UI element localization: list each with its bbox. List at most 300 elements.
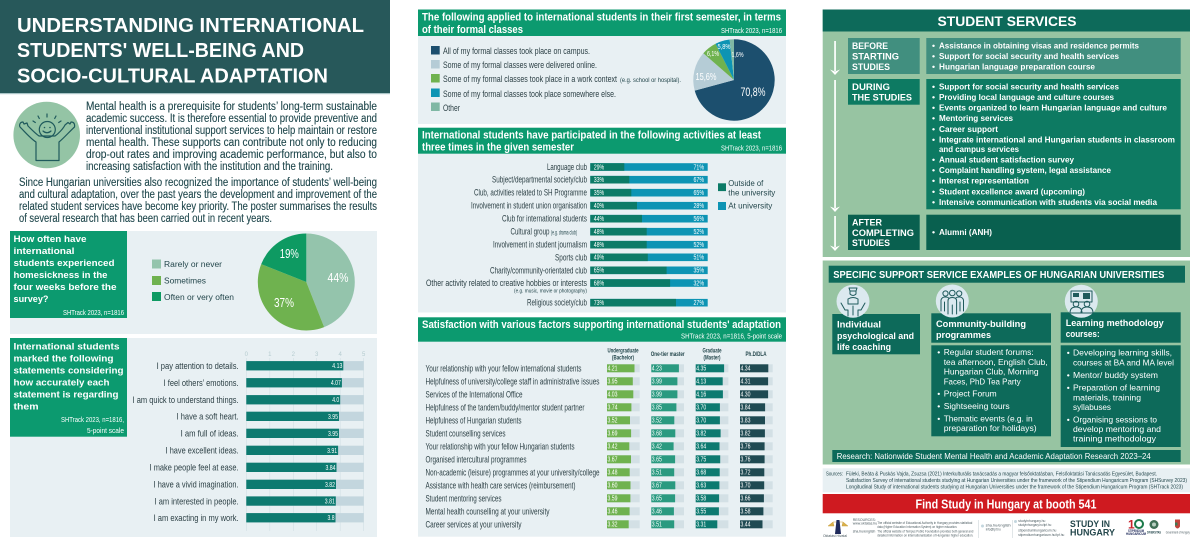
after completing studies label: STUDIES (852, 237, 890, 248)
contact links: stipendiumhungaricum.hu (1018, 529, 1056, 533)
logo: stipendium hungaricum 10: STIPENDIUM (1128, 529, 1144, 533)
logo: diversitas emblem (1147, 520, 1161, 534)
before starting studies list: Hungarian language preparation course (939, 61, 1095, 71)
satisfaction bar table: 3.82 (740, 431, 751, 438)
activities stacked bar chart: 52% (694, 242, 704, 249)
during the studies list: Providing local language and culture courses (939, 92, 1114, 102)
formal classes legend: Some of my formal classes were delivered online. (443, 60, 597, 71)
activities stacked bar chart: Religious society/club (527, 298, 587, 309)
during the studies label: DURING (852, 81, 890, 92)
satisfaction bar table: 3.76 (740, 444, 751, 451)
statements question box (10, 338, 127, 437)
title banner (0, 0, 390, 94)
satisfaction bar table: 4.13 (696, 379, 706, 386)
homesickness pie chart: 44% (328, 270, 349, 285)
activities stacked bar chart: 35% (594, 190, 604, 197)
satisfaction bar table: 3.42 (652, 444, 662, 451)
satisfaction bar table: 3.69 (608, 431, 618, 438)
title banner: STUDENTS' WELL-BEING AND (17, 40, 304, 62)
satisfaction bar table: Assistance with health care services (reimbursement) (426, 480, 576, 491)
during the studies list: Integrate international and Hungarian students in classroom (939, 134, 1175, 144)
satisfaction bar table: 3.70 (740, 483, 751, 490)
community-building list: Project Forum (944, 389, 997, 399)
activities stacked bar chart: 68% (594, 280, 604, 287)
satisfaction bar table: Services of the International Office (426, 389, 522, 400)
learning methodology list (1061, 345, 1181, 447)
satisfaction bar table: 3.32 (608, 522, 618, 529)
satisfaction bar table (426, 363, 773, 530)
satisfaction bar table: 4.21 (608, 366, 618, 373)
statements bar chart: 3.95 (328, 431, 338, 438)
student services heading: STUDENT SERVICES (938, 13, 1076, 29)
community-building list: preparation for holidays) (944, 423, 1037, 433)
intro paragraph 2: Since Hungarian universities also recognized the importance of students’ well-being (19, 177, 377, 189)
homesickness legend: Often or very often (164, 293, 234, 302)
satisfaction bar table: Helpfulness of the tandem/buddy/mentor student partner (426, 402, 585, 413)
satisfaction bar table: 3.42 (608, 444, 618, 451)
logo: educational authority scales: Oktatási Hivatal (823, 534, 847, 538)
activities stacked bar chart: Club, activities related to SH Programme (474, 188, 587, 199)
resource descriptions: data (Higher Education Information System) on higher education. (877, 525, 957, 529)
activities stacked bar chart: 65% (594, 268, 604, 275)
satisfaction bar table: 3.51 (652, 470, 662, 477)
after completing studies list: Alumni (ANH) (939, 227, 992, 237)
statements question box: how accurately each (14, 378, 110, 388)
homesickness question box: How often have (14, 234, 86, 244)
statements question box: marked the following (14, 354, 114, 364)
statements bar chart: 5 (362, 352, 366, 358)
intro paragraph 2: of several research that has been carried out in recent years. (19, 213, 272, 225)
statements question box: International students (14, 342, 120, 352)
individual coaching box (832, 314, 920, 354)
satisfaction bar table: 3.65 (652, 496, 662, 503)
intro paragraph 1: Mental health is a prerequisite for students’ long-term sustainable (86, 101, 377, 113)
logo: educational authority scales (823, 520, 848, 538)
homesickness question box: survey? (14, 294, 49, 304)
formal classes heading: of their formal classes (422, 24, 523, 36)
intro paragraph 1: interventional institutional support services to help maintain or restore (86, 125, 377, 137)
statements bar chart: I make people feel at ease. (150, 463, 239, 474)
formal classes legend: Some of my formal classes took place in a work context (443, 74, 617, 85)
contact links: info@tpf.hu (986, 528, 1001, 532)
activities legend: Outside of (728, 179, 764, 188)
satisfaction column headers: One-tier master (651, 352, 685, 358)
during the studies list: • (932, 113, 935, 123)
before starting studies label: STUDIES (852, 61, 890, 72)
satisfaction heading: Satisfaction with various factors supporting international students' adaptation (422, 319, 781, 331)
examples heading (829, 266, 1185, 283)
during the studies list: Career support (939, 124, 998, 134)
individual coaching box: psychological and (837, 330, 914, 341)
statements bar chart: 3.8 (328, 515, 335, 522)
homesickness question box: students experienced (14, 258, 115, 268)
contact links: sha.hu/english (986, 524, 1011, 528)
activities heading: International students have participated in the following activities at least (422, 130, 761, 142)
community-building list: • (937, 413, 940, 423)
intro paragraph 2: related student services have become key priority. The poster summarises the results (19, 201, 377, 213)
panel: student services (823, 10, 1190, 257)
satisfaction column headers: (Bachelor) (612, 355, 634, 361)
satisfaction column headers: Ph.D/DLA (746, 352, 767, 358)
arrow: during studies (830, 80, 840, 212)
during the studies list: • (932, 186, 935, 196)
before starting studies label: BEFORE (852, 40, 888, 51)
community-building heading box (931, 313, 1051, 343)
sources box: Füleki, Beáta & Puskás Vajda, Zsuzsa (2021) Interkulturális tanácsadás a magyar felsőoktatásban, Felsőoktatási Tanácsadás Egyesület, Budapest. (846, 471, 1157, 477)
satisfaction bar table: 4.31 (740, 379, 751, 386)
resource descriptions: detailed information on internationalisation of Hungarian higher education. (877, 533, 973, 537)
panel: satisfaction (418, 317, 786, 537)
statements bar chart: 3.84 (326, 465, 336, 472)
statements bar chart: 4.0 (332, 397, 339, 404)
activities stacked bar chart: Cultural group (510, 227, 550, 238)
title banner: UNDERSTANDING INTERNATIONAL (17, 15, 364, 37)
examples heading: SPECIFIC SUPPORT SERVICE EXAMPLES OF HUNGARIAN UNIVERSITIES (833, 270, 1165, 281)
satisfaction column headers: Graduate (702, 348, 722, 354)
community-building list: Sightseeing tours (944, 401, 1010, 411)
activities heading: three times in the given semester (422, 142, 575, 154)
during the studies list: • (932, 176, 935, 186)
resource descriptions: The official website of Tempus Public Foundation provides both general and (877, 529, 973, 533)
homesickness pie chart: 37% (274, 295, 294, 310)
activities stacked bar chart: 48% (594, 229, 604, 236)
homesickness legend (152, 260, 234, 302)
activities stacked bar chart: 56% (694, 216, 704, 223)
satisfaction bar table: 3.84 (740, 405, 751, 412)
activities stacked bar chart: 44% (594, 216, 604, 223)
learning methodology list: Organising sessions to (1073, 414, 1157, 424)
activities stacked bar chart: 48% (594, 242, 604, 249)
statements bar chart: 4 (339, 352, 343, 358)
panel: self-assessment statements (10, 338, 377, 537)
during the studies list: • (932, 165, 935, 175)
activities stacked bar chart: 33% (594, 177, 604, 184)
satisfaction bar table: 4.23 (652, 366, 662, 373)
homesickness question box (10, 231, 127, 318)
during the studies list: • (932, 197, 935, 207)
logo: study in hungary: HUNGARY (1070, 528, 1116, 538)
during the studies list: • (932, 103, 935, 113)
logo: stipendium hungaricum 10 (1126, 518, 1146, 536)
during the studies list: Mentoring services (939, 113, 1013, 123)
during the studies label (848, 79, 920, 105)
activities stacked bar chart: 71% (694, 164, 704, 171)
formal classes heading (418, 10, 786, 36)
during the studies list: • (932, 81, 935, 91)
after completing studies label (848, 215, 920, 250)
homesickness legend: Rarely or never (164, 260, 222, 269)
homesickness question box: international (14, 246, 74, 256)
panel: formal classes (418, 10, 786, 124)
booth call-to-action banner (823, 494, 1190, 513)
community-building list: tea afternoon, English Club, (944, 357, 1048, 367)
contact links: stipendiumhungaricum.hu/tpf.hu (1018, 533, 1064, 537)
during the studies list: Annual student satisfaction survey (939, 154, 1074, 164)
contact links (978, 519, 1064, 538)
formal classes heading: The following applied to international students in their first semester, in terms (422, 12, 781, 24)
statements bar chart: 2 (292, 352, 296, 358)
logo: stipendium hungaricum 10: 1 (1128, 518, 1135, 532)
during the studies list: • (932, 154, 935, 164)
satisfaction bar table: 3.70 (696, 405, 706, 412)
formal classes pie chart: 5,8% (718, 44, 730, 51)
statements bar chart: 3 (315, 352, 319, 358)
satisfaction heading: SHTrack 2023, n=1816, 5-point scale (681, 332, 782, 340)
resource links: www.oktatas.hu (853, 522, 877, 526)
formal classes pie chart: 1,6% (732, 52, 744, 59)
satisfaction bar table: Non-academic (leisure) programmes at your university/college (426, 467, 600, 478)
resource links (853, 518, 877, 534)
satisfaction bar table: 3.60 (608, 483, 618, 490)
after completing studies label: AFTER (852, 216, 882, 227)
during the studies list: Student excellence award (upcoming) (939, 186, 1085, 196)
satisfaction bar table: 3.55 (696, 509, 706, 516)
satisfaction bar table: 4.30 (740, 392, 751, 399)
community-building list: Regular student forums: (944, 347, 1034, 357)
activities legend: At university (728, 202, 772, 210)
formal classes pie chart (693, 39, 775, 121)
activities legend (718, 179, 775, 210)
activities stacked bar chart: 51% (694, 255, 704, 262)
formal classes legend: (e.g. school or hospital). (620, 77, 681, 84)
intro paragraph 2 (19, 177, 377, 225)
satisfaction bar table: 3.82 (696, 431, 706, 438)
satisfaction bar table: Your relationship with your fellow Hungarian students (426, 441, 575, 452)
learning methodology heading box (1061, 312, 1181, 343)
homesickness question box: four weeks before the (14, 282, 117, 292)
learning methodology list: • (1067, 414, 1070, 424)
community-building list: Thematic events (e.g. in (944, 413, 1033, 423)
during the studies list: Interest representation (939, 176, 1029, 186)
satisfaction bar table: Your relationship with your fellow international students (426, 363, 582, 374)
footer resources and logos (823, 518, 1190, 538)
formal classes pie chart: 70,8% (740, 85, 766, 99)
satisfaction bar table: 3.44 (740, 522, 751, 529)
during the studies list (926, 79, 1181, 209)
panel: specific support service examples (823, 260, 1190, 464)
statements bar chart: I have a soft heart. (177, 412, 239, 423)
title banner: SOCIO-CULTURAL ADAPTATION (17, 66, 328, 88)
community-building heading box: Community-building (936, 318, 1026, 329)
homesickness question box: SHTrack 2023, n=1816 (63, 308, 124, 317)
after completing studies label: COMPLETING (852, 227, 914, 238)
learning methodology list: materials, training (1073, 392, 1141, 402)
satisfaction bar table: 3.74 (608, 405, 618, 412)
satisfaction bar table: 3.67 (652, 483, 662, 490)
during the studies list: • (932, 124, 935, 134)
individual coaching box: life coaching (837, 341, 891, 352)
icon: happy person with raised arms (13, 102, 80, 168)
statements bar chart: 3.82 (325, 482, 335, 489)
during the studies list: Intensive communication with students via social media (939, 197, 1157, 207)
statements bar chart: 0 (245, 352, 249, 358)
learning methodology list: Mentor/ buddy system (1073, 370, 1158, 380)
satisfaction bar table: 3.76 (740, 457, 751, 464)
resource descriptions (877, 521, 973, 537)
satisfaction heading (418, 317, 786, 342)
before starting studies label (848, 38, 920, 74)
icon: teacher and students at board (1065, 285, 1098, 318)
satisfaction bar table: 3.46 (608, 509, 618, 516)
satisfaction bar table: 3.99 (652, 392, 662, 399)
satisfaction bar table: 3.72 (740, 470, 751, 477)
statements bar chart: 3.81 (325, 498, 335, 506)
arrow: after completing studies (830, 216, 840, 251)
statements bar chart: I am exacting in my work. (154, 513, 239, 524)
statements question box: statements considering (14, 366, 124, 376)
satisfaction bar table: 3.99 (652, 379, 662, 386)
intro paragraph 2: and cultural adaptation, over the past years the development and improvement of the (19, 189, 377, 201)
community-building list: Faces, PhD Tea Party (944, 376, 1021, 386)
statements bar chart: I am interested in people. (155, 496, 239, 507)
satisfaction bar table: 3.46 (652, 509, 662, 516)
formal classes legend: Other (443, 103, 461, 114)
after completing studies list (926, 215, 1181, 250)
activities stacked bar chart: 35% (694, 268, 704, 275)
activities stacked bar chart: Sports club (555, 252, 587, 263)
during the studies label: THE STUDIES (852, 91, 912, 102)
satisfaction bar table: 3.48 (608, 470, 618, 477)
panel: activities (418, 128, 786, 312)
sources box (823, 468, 1190, 492)
booth call-to-action banner: Find Study in Hungary at booth 541 (916, 496, 1096, 511)
satisfaction bar table: 3.52 (608, 418, 618, 425)
activities stacked bar chart: 65% (694, 190, 704, 197)
activities stacked bar chart: 73% (594, 300, 604, 307)
satisfaction bar table: 3.83 (740, 418, 751, 425)
activities stacked bar chart: Subject/departmental society/club (492, 175, 587, 186)
satisfaction bar table: Helpfulness of Hungarian students (426, 415, 522, 426)
activities stacked bar chart: Charity/community-orientated club (490, 265, 587, 276)
satisfaction bar table: 3.65 (652, 457, 662, 464)
satisfaction bar table: 3.75 (696, 457, 706, 464)
formal classes heading: SHTrack 2023, n=1816 (721, 26, 782, 35)
intro paragraph 1: mental health. These supports can contribute not only to reducing (86, 137, 377, 149)
after completing studies list: • (932, 227, 935, 237)
contact links: studyinhungary.hu/tpf.hu (1018, 523, 1051, 527)
activities stacked bar chart: 49% (594, 255, 604, 262)
before starting studies list: Assistance in obtaining visas and residence permits (939, 40, 1139, 50)
satisfaction bar table: 4.35 (696, 366, 706, 373)
learning methodology list: Developing learning skills, (1073, 347, 1172, 357)
contact links: studyinhungary.hu (1018, 519, 1045, 523)
community-building list (931, 345, 1051, 436)
logo: hungarian crest (1166, 520, 1190, 534)
satisfaction bar table: 3.59 (608, 496, 618, 503)
statements bar chart: 4.07 (331, 380, 341, 387)
homesickness pie chart (258, 234, 355, 330)
statements bar chart: 1 (268, 352, 272, 358)
activities stacked bar chart: 32% (694, 280, 704, 287)
community-building list: • (937, 389, 940, 399)
statements bar chart: 3.95 (328, 414, 338, 421)
before starting studies list (926, 38, 1181, 74)
during the studies list: Support for social security and health services (939, 81, 1119, 91)
resource descriptions: The official website of Educational Authority in Hungary provides statistical (877, 521, 972, 525)
satisfaction bar table: Organised intercultural programmes (426, 454, 527, 465)
formal classes legend: Some of my formal classes took place somewhere else. (443, 89, 616, 100)
before starting studies list: Support for social security and health services (939, 51, 1119, 61)
logo: study in hungary (1070, 519, 1116, 538)
satisfaction bar table: 3.68 (696, 470, 706, 477)
homesickness pie chart: 19% (280, 246, 299, 261)
activities stacked bar chart: 67% (694, 177, 704, 184)
community-building list: • (937, 347, 940, 357)
homesickness question box: homesickness in the (14, 270, 108, 280)
statements bar chart: I have a vivid imagination. (154, 480, 239, 491)
satisfaction bar table: 3.70 (696, 418, 706, 425)
community-building list: Hungarian Club, Morning (944, 367, 1039, 377)
formal classes pie chart: 6,1% (707, 51, 719, 58)
statements bar chart: I pay attention to details. (157, 361, 239, 372)
formal classes legend: All of my formal classes took place on campus. (443, 46, 590, 57)
icon: coach with raised hands (836, 285, 870, 318)
activities heading (418, 128, 786, 154)
activities legend: the university (728, 188, 775, 197)
icon: group of people (936, 284, 969, 318)
resource links: sha.hu/english (853, 530, 875, 534)
individual coaching box: Individual (837, 319, 881, 330)
satisfaction bar table: 3.68 (652, 431, 662, 438)
satisfaction bar table: 4.03 (608, 392, 618, 399)
statements question box: statement is regarding (14, 390, 119, 400)
learning methodology heading box: courses: (1066, 328, 1100, 339)
activities stacked bar chart: (e.g. drama club) (551, 231, 577, 237)
statements bar chart: 4.13 (332, 363, 342, 370)
before starting studies list: • (932, 61, 935, 71)
intro paragraph 1: drop-out rates and improving academic performance, but also to (86, 149, 377, 161)
statements question box: 5-point scale (87, 426, 124, 435)
during the studies list: • (932, 134, 935, 144)
before starting studies list: • (932, 51, 935, 61)
satisfaction bar table: 3.95 (608, 379, 618, 386)
statements question box: SHTrack 2023, n=1816, (61, 415, 124, 424)
activities stacked bar chart: (e.g. music, movie or photography) (514, 288, 587, 294)
intro paragraph 1: increasing satisfaction with the institution and the training. (86, 161, 333, 173)
activities stacked bar chart (426, 162, 708, 309)
arrow: before starting studies (830, 41, 840, 75)
learning methodology list: • (1067, 370, 1070, 380)
during the studies list: and campus services (939, 144, 1019, 154)
logo: study in hungary: STUDY IN (1070, 519, 1110, 530)
activities stacked bar chart: Other activity related to creative hobbies or interests (426, 278, 587, 289)
panel: homesickness (10, 231, 377, 334)
activities heading: SHTrack 2023, n=1816 (721, 144, 782, 152)
satisfaction bar table: 3.58 (696, 496, 706, 503)
community-building list: • (937, 401, 940, 411)
during the studies list: • (932, 92, 935, 102)
satisfaction bar table: 3.51 (652, 522, 662, 529)
satisfaction bar table: Career services at your university (426, 519, 522, 530)
statements bar chart (133, 352, 366, 531)
learning methodology list: Preparation of learning (1073, 383, 1160, 393)
satisfaction column headers (608, 348, 767, 361)
activities stacked bar chart: 40% (594, 203, 604, 210)
activities stacked bar chart: 52% (694, 229, 704, 236)
statements question box: them (14, 402, 38, 412)
intro paragraph 1 (86, 101, 377, 173)
statements bar chart: I have excellent ideas. (166, 446, 239, 457)
statements bar chart: I am quick to understand things. (133, 395, 239, 406)
satisfaction bar table: Helpfulness of university/college staff in administrative issues (426, 376, 600, 387)
activities stacked bar chart: 28% (694, 203, 704, 210)
logo: diversitas emblem: DIVERSITAS (1147, 530, 1161, 534)
learning methodology list: syllabuses (1073, 402, 1111, 412)
learning methodology list: • (1067, 347, 1070, 357)
research note bar: Research: Nationwide Student Mental Health and Academic Adaptation Research 2023–24 (837, 451, 1151, 461)
learning methodology list: develop mentoring and (1073, 424, 1161, 434)
activities stacked bar chart: 27% (694, 300, 704, 307)
